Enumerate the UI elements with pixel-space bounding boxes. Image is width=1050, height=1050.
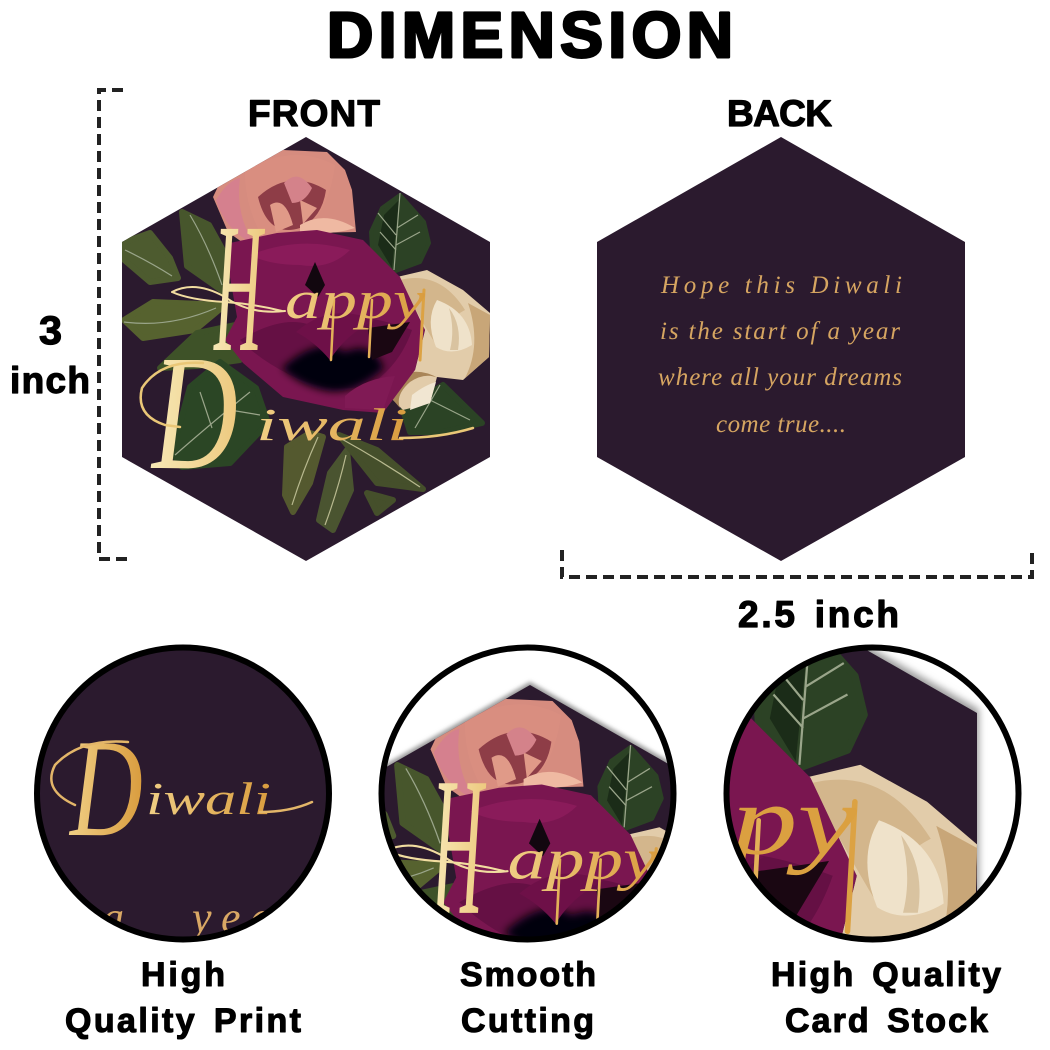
width dimension bracket [562, 550, 1032, 577]
detail circle: print: iwali [146, 773, 271, 824]
caption: smooth cutting: Cutting [461, 1002, 594, 1040]
front label: FRONT [248, 93, 380, 134]
greeting: Happy Diwali: D [150, 322, 238, 505]
greeting: Happy Diwali: appy [285, 270, 425, 330]
greeting: Happy Diwali: iwali [256, 399, 408, 450]
panel: back card [597, 137, 965, 561]
greeting: Happy Diwali: H [213, 186, 265, 391]
caption: high quality card stock: High Quality [771, 956, 1001, 994]
detail circle: print: a [102, 893, 124, 942]
caption: smooth cutting: Smooth [460, 956, 596, 994]
back message: where all your dreams [658, 364, 902, 391]
panel: front card [122, 137, 490, 561]
height label [10, 309, 90, 401]
greeting: Happy Diwali [141, 186, 473, 505]
detail circle: print: yea [188, 893, 272, 942]
caption: high quality card stock [771, 956, 1001, 1040]
caption: high quality print: High [141, 956, 225, 994]
caption: smooth cutting [460, 956, 596, 1040]
title: DIMENSION [327, 0, 733, 71]
detail circle: print [37, 648, 329, 942]
height label: 3 [39, 309, 62, 353]
caption: high quality print: Quality Print [65, 1002, 301, 1040]
width label: 2.5 inch [738, 594, 899, 635]
back message [658, 272, 902, 438]
caption: high quality card stock: Card Stock [785, 1002, 988, 1040]
back message: Hope this Diwali [660, 272, 902, 299]
detail circle: cutting: H [431, 737, 487, 957]
back label: BACK [727, 93, 832, 134]
caption: high quality print [65, 956, 301, 1040]
detail circle: cutting: appy [508, 829, 658, 892]
height dimension bracket [99, 90, 127, 559]
detail circle: card stock [724, 644, 1022, 942]
detail circle: print: D [68, 711, 143, 866]
height label: inch [10, 360, 90, 401]
detail circle: cutting [378, 644, 676, 942]
back message: is the start of a year [660, 318, 900, 345]
back message: come true.... [716, 411, 846, 438]
detail circle: card stock: appy [598, 765, 858, 876]
